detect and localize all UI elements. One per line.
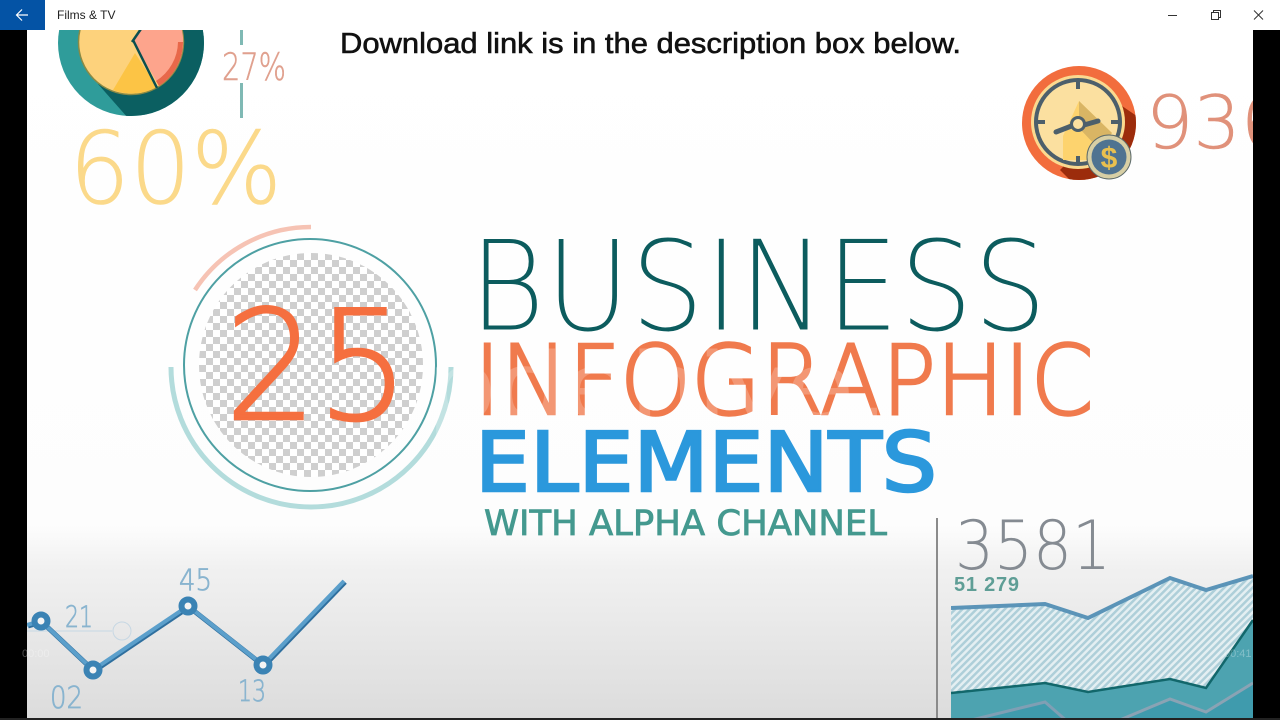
player timestamps: 00:00 [22,648,50,660]
heading: INFOGRAPHIC: INFOGRAPHIC [474,325,1094,437]
bottom edge [0,718,1280,720]
player timestamps [22,648,1252,660]
heading: ELEMENTS: ELEMENTS [475,416,937,511]
player timestamps: 00:41 [1224,648,1252,660]
stat: 3581 with axis: 3581 [955,507,1111,586]
line chart [25,563,345,716]
badge: 25 in circle [171,227,451,507]
watermark: pdehive. [428,332,888,439]
line chart: 45 [179,563,212,597]
area chart [951,576,1253,720]
line chart: 02 [50,681,83,716]
stat: 60 percent: 60% [69,110,282,227]
app name: Films & TV [57,8,115,22]
heading: WITH ALPHA CHANNEL: WITH ALPHA CHANNEL [484,504,887,544]
pie chart icon [58,30,204,116]
stat: 27 percent: 27% [222,46,286,89]
caption: download link: Download link is in the description box below. [340,28,961,60]
stat: 51 279: 51 279 [954,574,1019,596]
heading: BUSINESS: BUSINESS [469,213,1047,360]
line chart: 21 [65,600,93,634]
window controls [1168,10,1263,20]
title bar [0,0,1280,30]
back button [0,0,45,30]
badge: 25 in circle: 25 [225,278,409,455]
icon: clock with dollar coin [1022,66,1136,180]
stat: 27 percent [222,30,286,118]
icon: clock with dollar coin: $ [1101,142,1118,175]
line chart: 13 [238,674,266,708]
